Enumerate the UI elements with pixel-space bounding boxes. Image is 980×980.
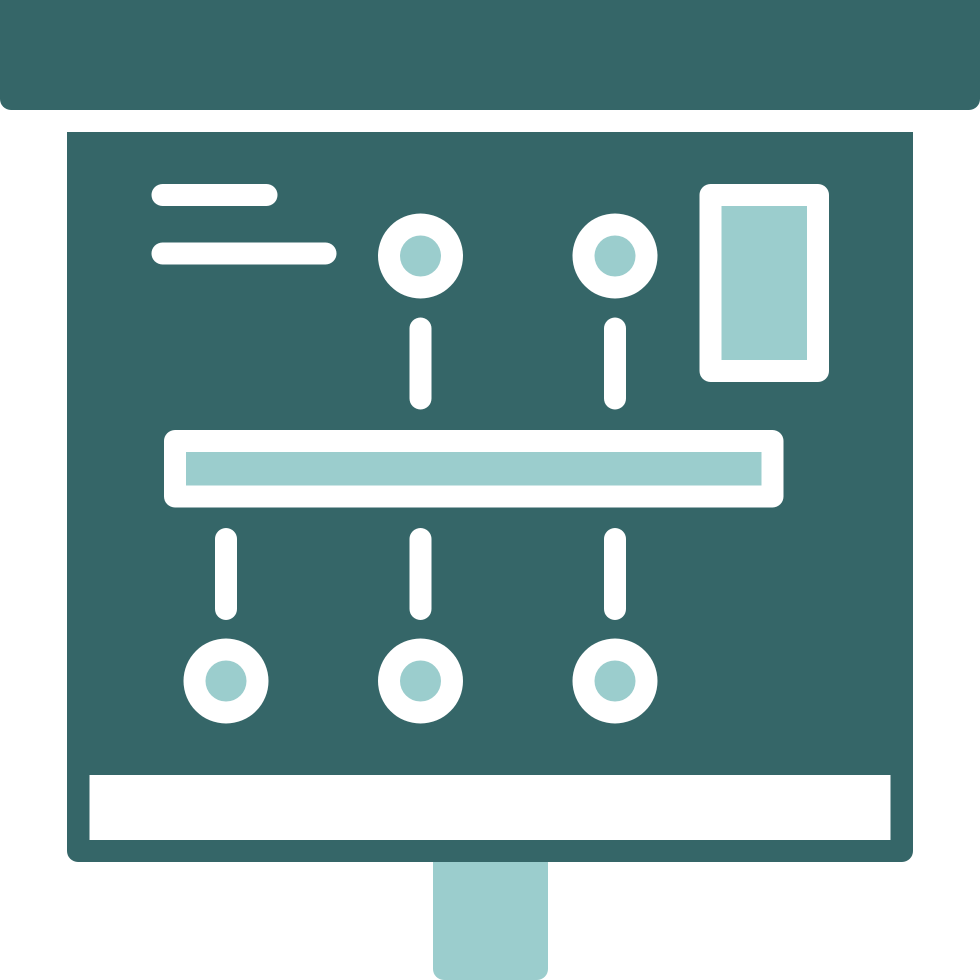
stand post	[433, 855, 548, 980]
top-right card	[700, 184, 829, 382]
top node 2	[572, 214, 658, 298]
top connector 1	[410, 318, 432, 410]
bottom node 3	[572, 638, 658, 724]
bottom connector 3	[604, 528, 626, 620]
bottom node 2	[378, 638, 463, 724]
bottom node 1	[184, 638, 268, 724]
bottom white strip	[90, 775, 890, 840]
bottom connector 2	[410, 528, 432, 620]
board panel	[67, 132, 913, 862]
top roller bar	[0, 0, 980, 110]
top connector 2	[604, 318, 626, 410]
bottom connector 1	[215, 528, 237, 620]
timeline bar	[164, 430, 784, 508]
text line short	[152, 184, 278, 206]
top node 1	[378, 214, 463, 298]
text line long	[152, 242, 336, 264]
